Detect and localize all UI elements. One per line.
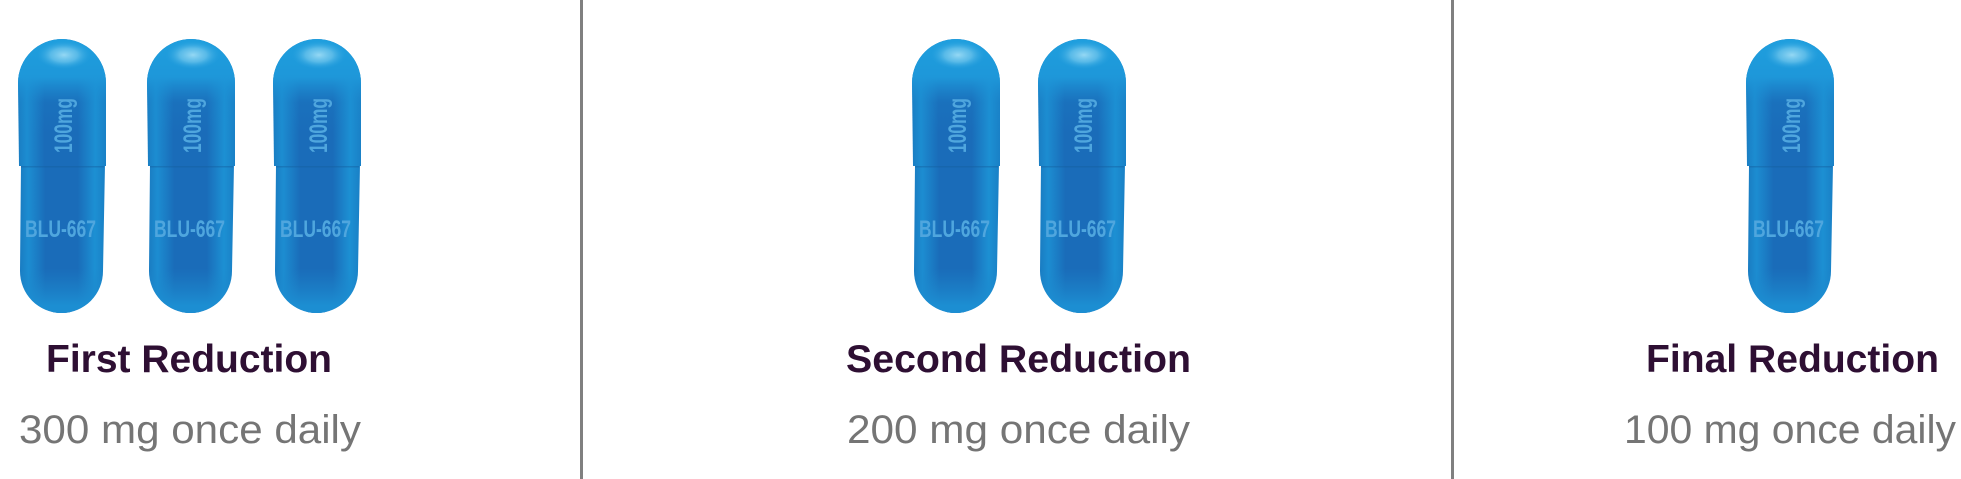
capsule 2: BLU-667 bbox=[154, 216, 225, 243]
dose: 100 mg: 100 mg once daily bbox=[1624, 408, 1956, 452]
panel: first reduction bbox=[18, 39, 361, 452]
heading: final reduction: Final Reduction bbox=[1646, 338, 1939, 381]
capsule 3: BLU-667 bbox=[280, 216, 351, 243]
panel: final reduction bbox=[1624, 39, 1956, 452]
capsule 1 bbox=[912, 39, 1000, 313]
dose: 200 mg: 200 mg once daily bbox=[847, 408, 1190, 452]
heading: first reduction: First Reduction bbox=[46, 338, 332, 381]
dose: 300 mg: 300 mg once daily bbox=[19, 408, 361, 452]
capsule 2 bbox=[1038, 39, 1126, 313]
capsule 1 bbox=[18, 39, 106, 313]
panel: second reduction bbox=[846, 39, 1191, 452]
capsule 1: 100mg bbox=[944, 98, 972, 153]
capsule 1: BLU-667 bbox=[25, 216, 96, 243]
heading: second reduction: Second Reduction bbox=[846, 338, 1191, 381]
capsule 3 bbox=[273, 39, 361, 313]
capsule 3: 100mg bbox=[305, 98, 333, 153]
capsule 1: 100mg bbox=[1778, 98, 1806, 153]
capsule 1: 100mg bbox=[50, 98, 78, 153]
capsule 2: 100mg bbox=[179, 98, 207, 153]
capsule 1 bbox=[1746, 39, 1834, 313]
capsule 2: 100mg bbox=[1070, 98, 1098, 153]
capsule 1: BLU-667 bbox=[1753, 216, 1824, 243]
capsule 2: BLU-667 bbox=[1045, 216, 1116, 243]
capsule 1: BLU-667 bbox=[919, 216, 990, 243]
capsule 2 bbox=[147, 39, 235, 313]
